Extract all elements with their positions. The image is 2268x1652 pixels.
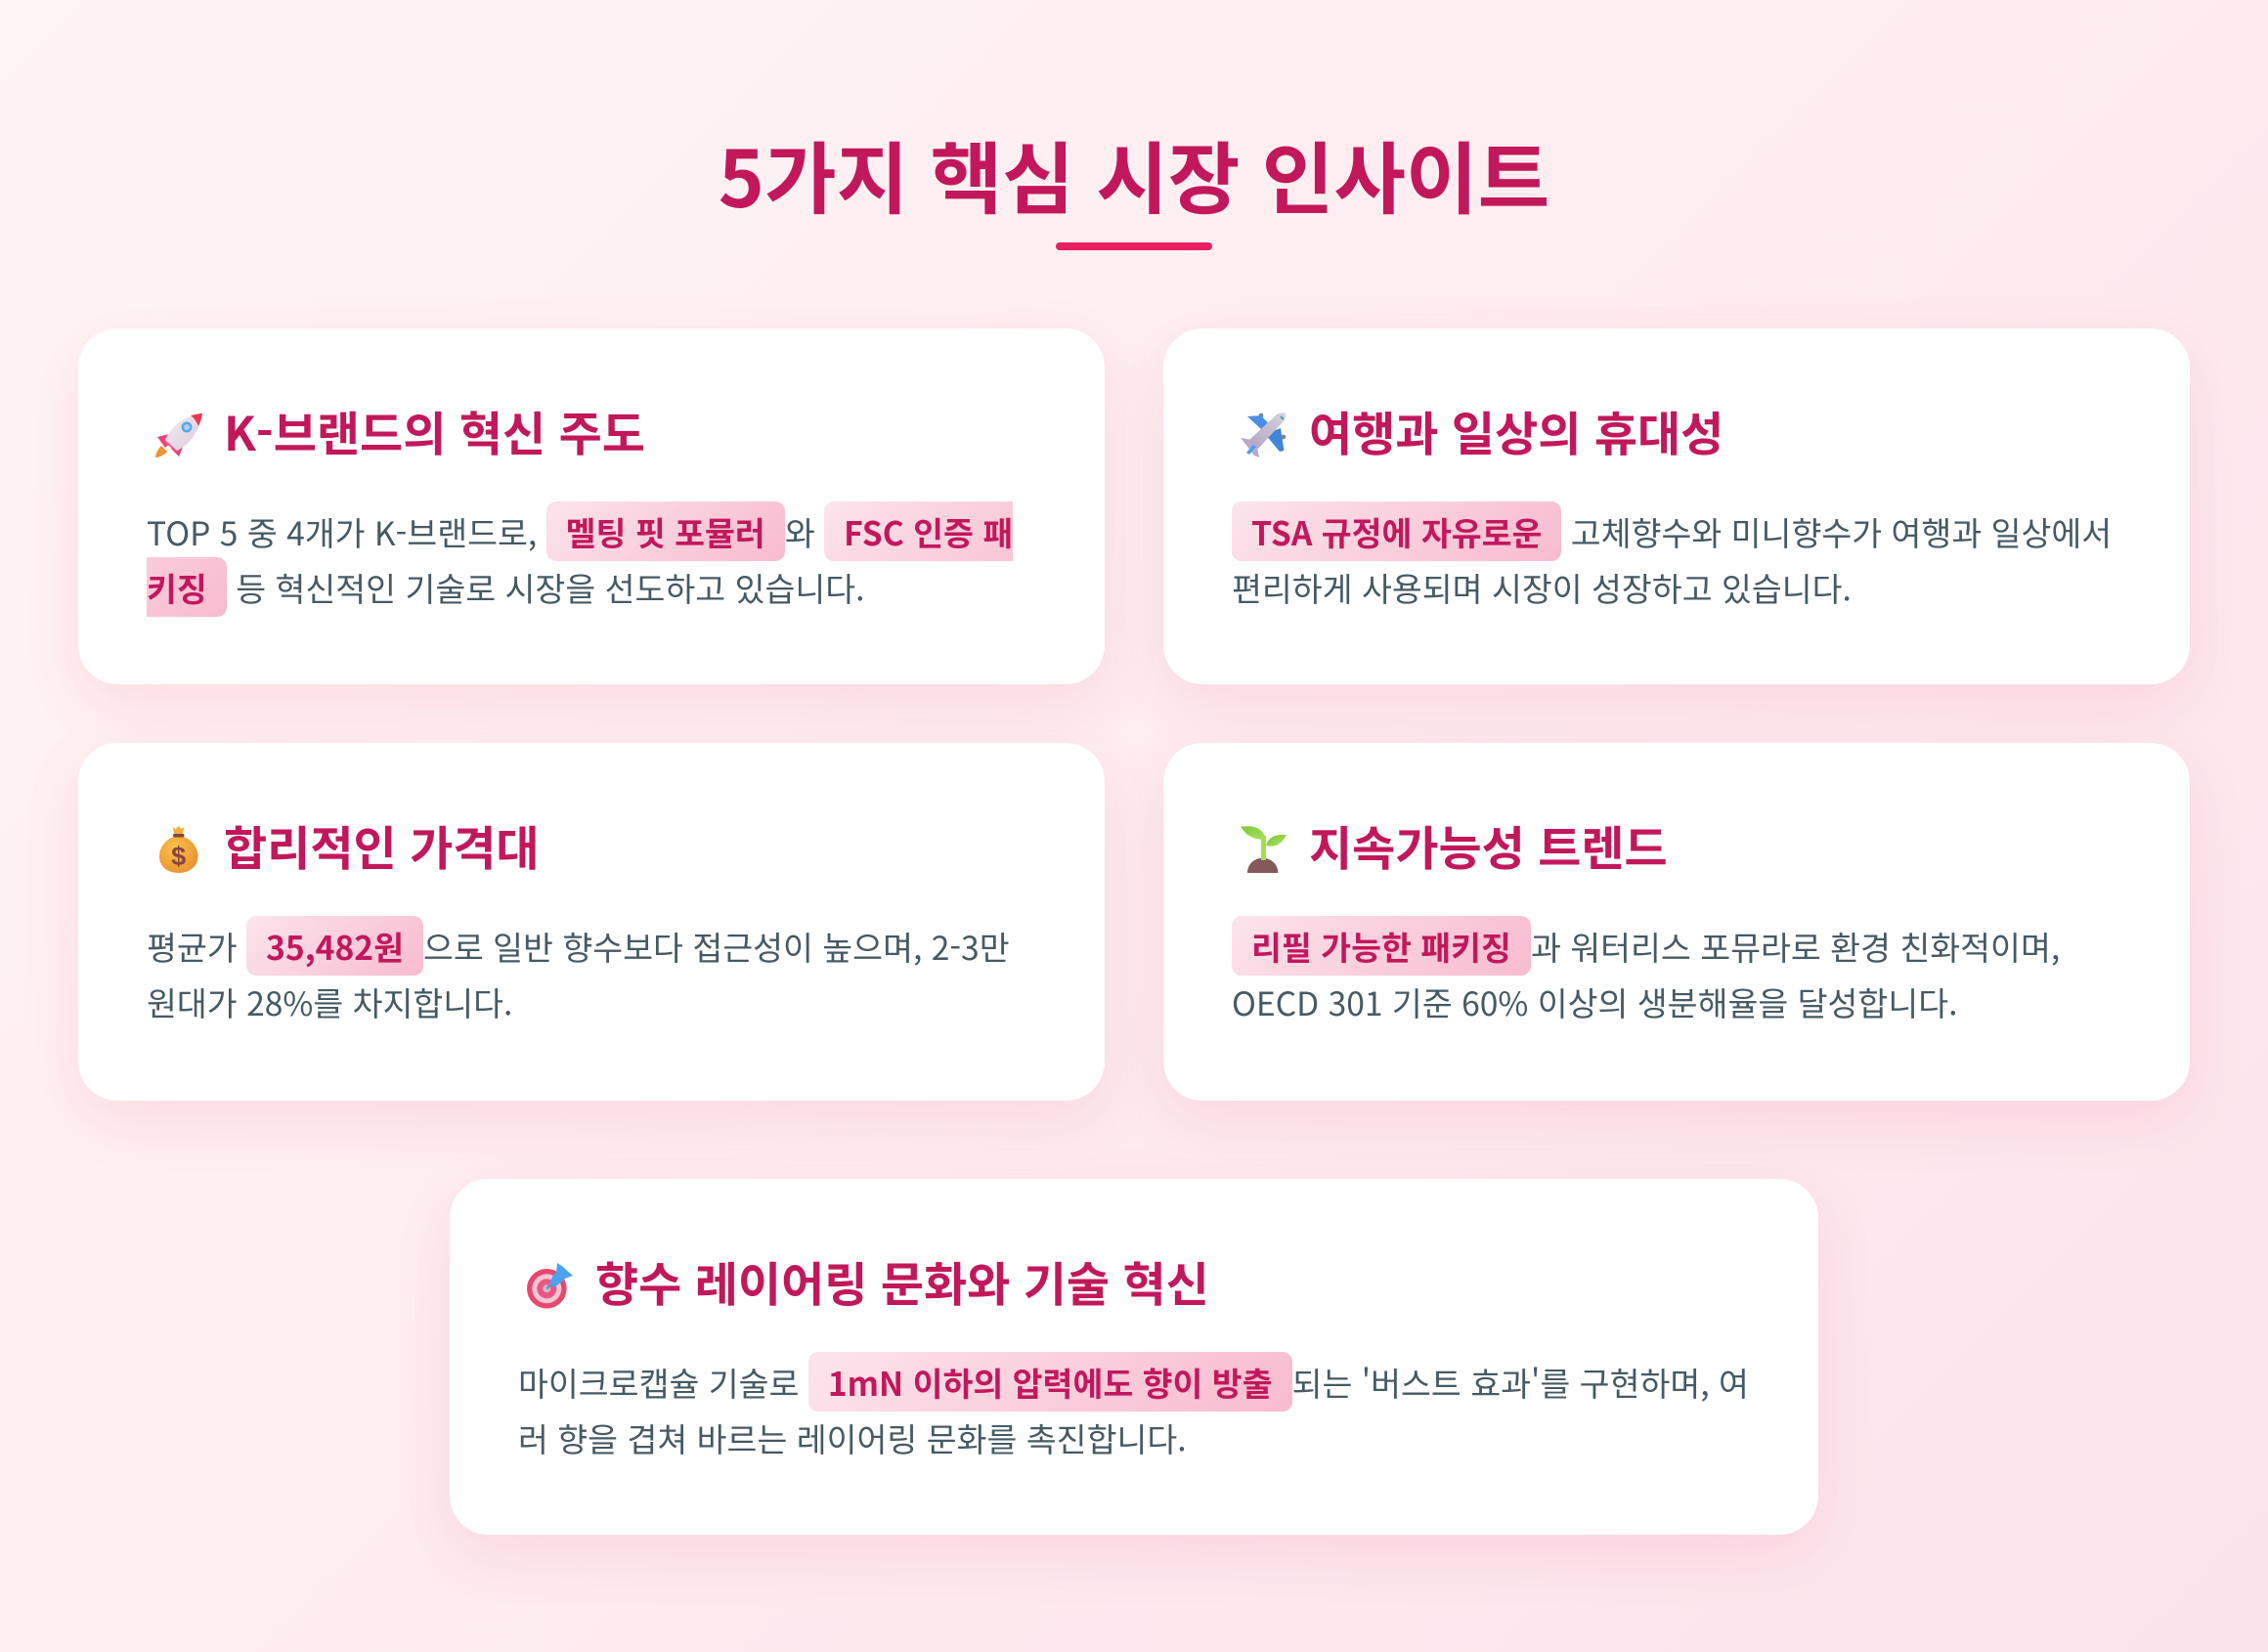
title: 5가지 핵심 시장 인사이트 [719,117,1549,231]
panel: layering culture [450,1179,1818,1535]
icon: money bag [159,826,197,873]
panel: sustainability [1163,743,2190,1101]
icon: target with dart [527,1263,573,1309]
heading: K-brand innovation: K-브랜드의 혁신 주도 [224,396,645,464]
text block: 평균가 35,482원 으로 일반 향수보다 접근성이 높으며, 2-3만원대가 28%를 차지합니다. [147,921,1010,1025]
icon: seedling [1241,826,1287,873]
panel: travel portability [1163,328,2190,684]
panel: affordable price [78,743,1105,1101]
text block: TSA 규정에 자유로운 고체향수와 미니향수가 여행과 일상에서 편리하게 사용되며 시장이 성장하고 있습니다. [1232,506,2112,611]
heading: sustainability: 지속가능성 트렌드 [1309,810,1668,879]
text block: TOP 5 중 4개가 K-브랜드로, 멜팅 핏 포뮬러 와 FSC 인증 패키징 등 혁신적인 기술로 시장을 선도하고 있습니다. [147,506,1013,611]
icon: money bag: $ [171,842,186,871]
title underline [1056,242,1212,250]
heading: layering culture: 향수 레이어링 문화와 기술 혁신 [595,1246,1209,1315]
text block: 리필 가능한 패키징 과 워터리스 포뮤라로 환경 친화적이며, OECD 301 기준 60% 이상의 생분해율을 달성합니다. [1232,921,2060,1025]
icon: airplane [1241,413,1287,457]
heading: affordable price: 합리적인 가격대 [224,810,540,879]
icon: rocket [155,413,202,457]
heading: travel portability: 여행과 일상의 휴대성 [1309,396,1723,464]
text block: 마이크로캡슐 기술로 1mN 이하의 압력에도 향이 방출 되는 '버스트 효과'를 구현하며, 여러 향을 겹쳐 바르는 레이어링 문화를 촉진합니다. [518,1357,1749,1461]
panel: K-brand innovation [78,328,1105,684]
